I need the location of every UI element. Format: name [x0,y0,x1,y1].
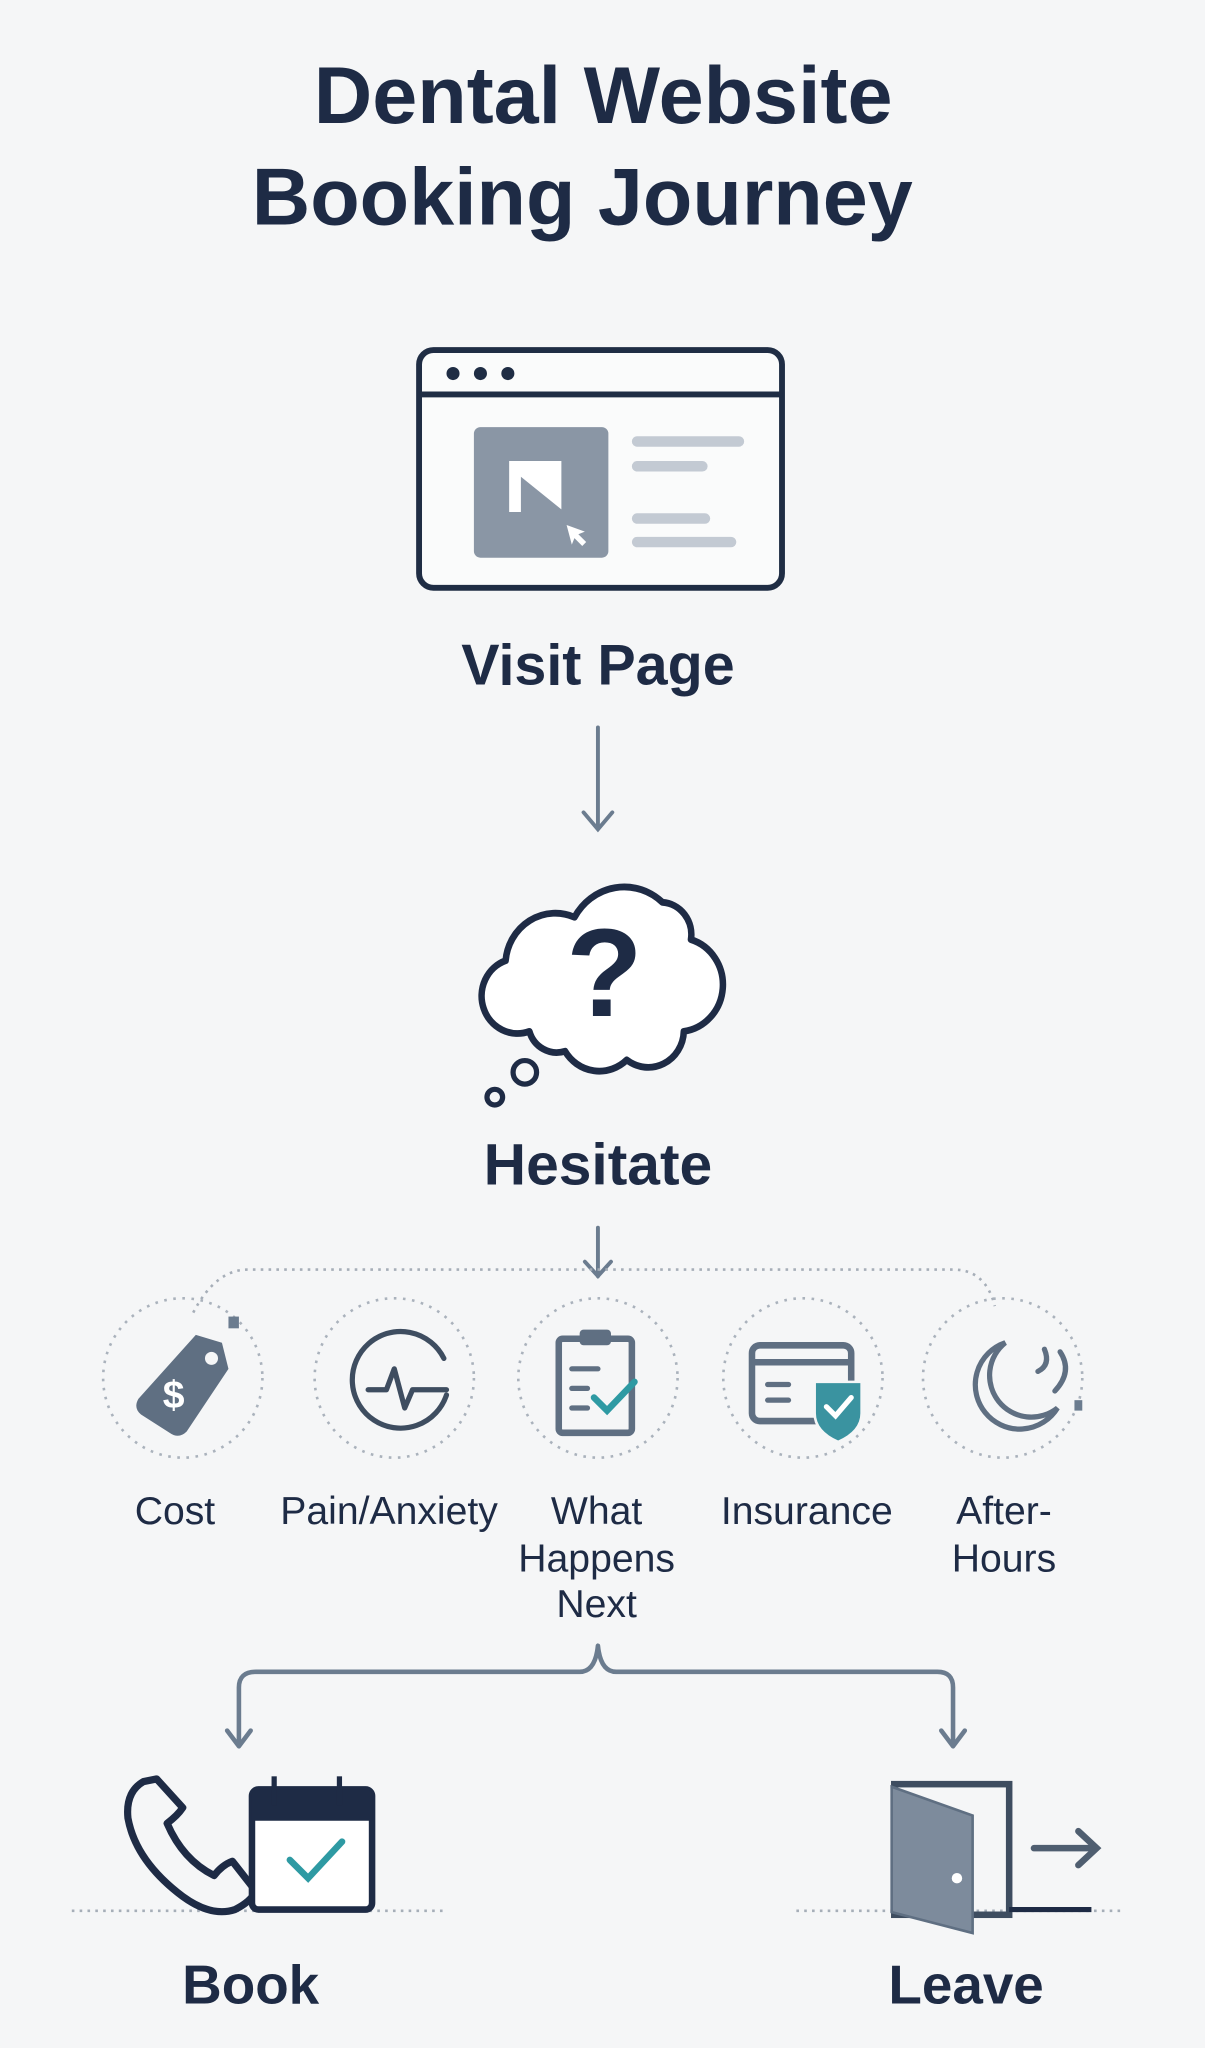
heading: Hesitate: Hesitate [484,1133,712,1198]
dotted connector [193,1270,995,1313]
icon: moon after-hours [975,1343,1082,1429]
dotted ground lines [72,1910,1123,1912]
reason labels: Cost [135,1490,215,1533]
icon: cost tag [136,1317,239,1436]
arrow: branch brace [227,1646,965,1746]
reason labels: Next [556,1583,637,1626]
icon: door exit [892,1784,1097,1933]
icon: insurance card [752,1345,862,1442]
reason labels: Insurance [721,1490,893,1533]
arrow: visit to hesitate [584,728,612,829]
title: Booking Journey [252,153,913,243]
reason labels: Happens [518,1537,675,1580]
icon: thought cloud: ? [566,903,643,1043]
heading: Visit Page: Visit Page [461,633,735,697]
title: Dental Website [314,51,892,141]
icon: browser window [419,350,782,588]
icon: thought cloud [482,887,723,1105]
arrow: hesitate to reasons [585,1228,611,1276]
panel: reasons [103,1298,1082,1626]
reason labels: Pain/Anxiety [280,1490,498,1533]
reason labels: Hours [952,1537,1056,1580]
icon: phone and calendar [128,1776,372,1912]
title [252,51,913,243]
reason labels: What [551,1490,642,1533]
reason labels [135,1490,1056,1626]
reason labels: After- [956,1490,1052,1533]
icon: pain pulse [352,1332,446,1428]
icon: cost tag: $ [163,1374,185,1417]
icon: clipboard [559,1330,634,1433]
heading: Book: Book [182,1954,320,2016]
heading: Leave: Leave [888,1954,1044,2016]
